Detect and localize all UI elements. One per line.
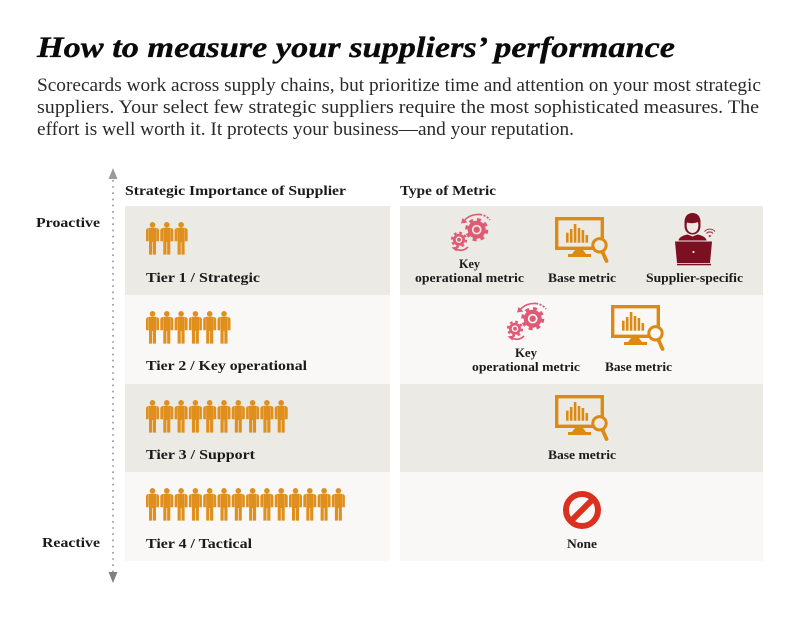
panel: tier 1 background (125, 206, 763, 295)
label: tier 4: Tier 4 / Tactical (146, 537, 252, 552)
axis label: proactive: Proactive (36, 216, 100, 231)
panel: tier 2 background (125, 295, 763, 384)
label: none: None (567, 537, 597, 551)
label: key operational metric, tier 1 (415, 257, 524, 285)
icon: 6 suppliers (146, 311, 230, 344)
label: tier 1: Tier 1 / Strategic (146, 271, 260, 286)
label: tier 3: Tier 3 / Support (146, 448, 255, 463)
icon: key operational metric, tier 2 (508, 303, 546, 340)
label: supplier-specific: Supplier-specific (646, 271, 743, 285)
intro text: Scorecards work across supply chains, but prioritize time and attention on your most strategic (37, 75, 761, 96)
label: key operational metric, tier 2 (472, 346, 580, 374)
icon: 10 suppliers (146, 400, 288, 433)
column heading: strategic importance: Strategic Importance of Supplier (125, 184, 346, 199)
icon: 3 suppliers (146, 222, 188, 255)
label: key operational metric, tier 2: operational metric (472, 360, 580, 374)
title: How to measure your suppliers’ performance (36, 31, 675, 64)
label: base metric, tier 1: Base metric (548, 271, 616, 285)
icon: supplier-specific person with laptop (675, 213, 715, 265)
intro text (37, 75, 761, 140)
icon: none, prohibited sign (566, 494, 598, 526)
icon: base metric, tier 1 (557, 219, 606, 261)
intro text: suppliers. Your select few strategic suppliers require the most sophisticated measures. The (37, 97, 759, 118)
icon: base metric, tier 2 (613, 307, 662, 349)
icon: 14 suppliers (146, 488, 345, 521)
label: base metric, tier 3: Base metric (548, 448, 616, 462)
panel: tier 3 background (125, 384, 763, 472)
intro text: effort is well worth it. It protects your business—and your reputation. (37, 119, 574, 140)
column heading: type of metric: Type of Metric (400, 184, 496, 199)
icon: base metric, tier 3 (557, 397, 606, 439)
label: key operational metric, tier 2: Key (515, 346, 538, 360)
panel: tier 4 background (125, 472, 763, 561)
icon: key operational metric, tier 1 (452, 214, 490, 252)
label: key operational metric, tier 1: operational metric (415, 271, 524, 285)
label: key operational metric, tier 1: Key (459, 257, 481, 271)
label: base metric, tier 2: Base metric (605, 360, 672, 374)
label: tier 2: Tier 2 / Key operational (146, 359, 307, 374)
axis arrow: proactive to reactive (108, 168, 118, 583)
axis label: reactive: Reactive (42, 536, 100, 551)
